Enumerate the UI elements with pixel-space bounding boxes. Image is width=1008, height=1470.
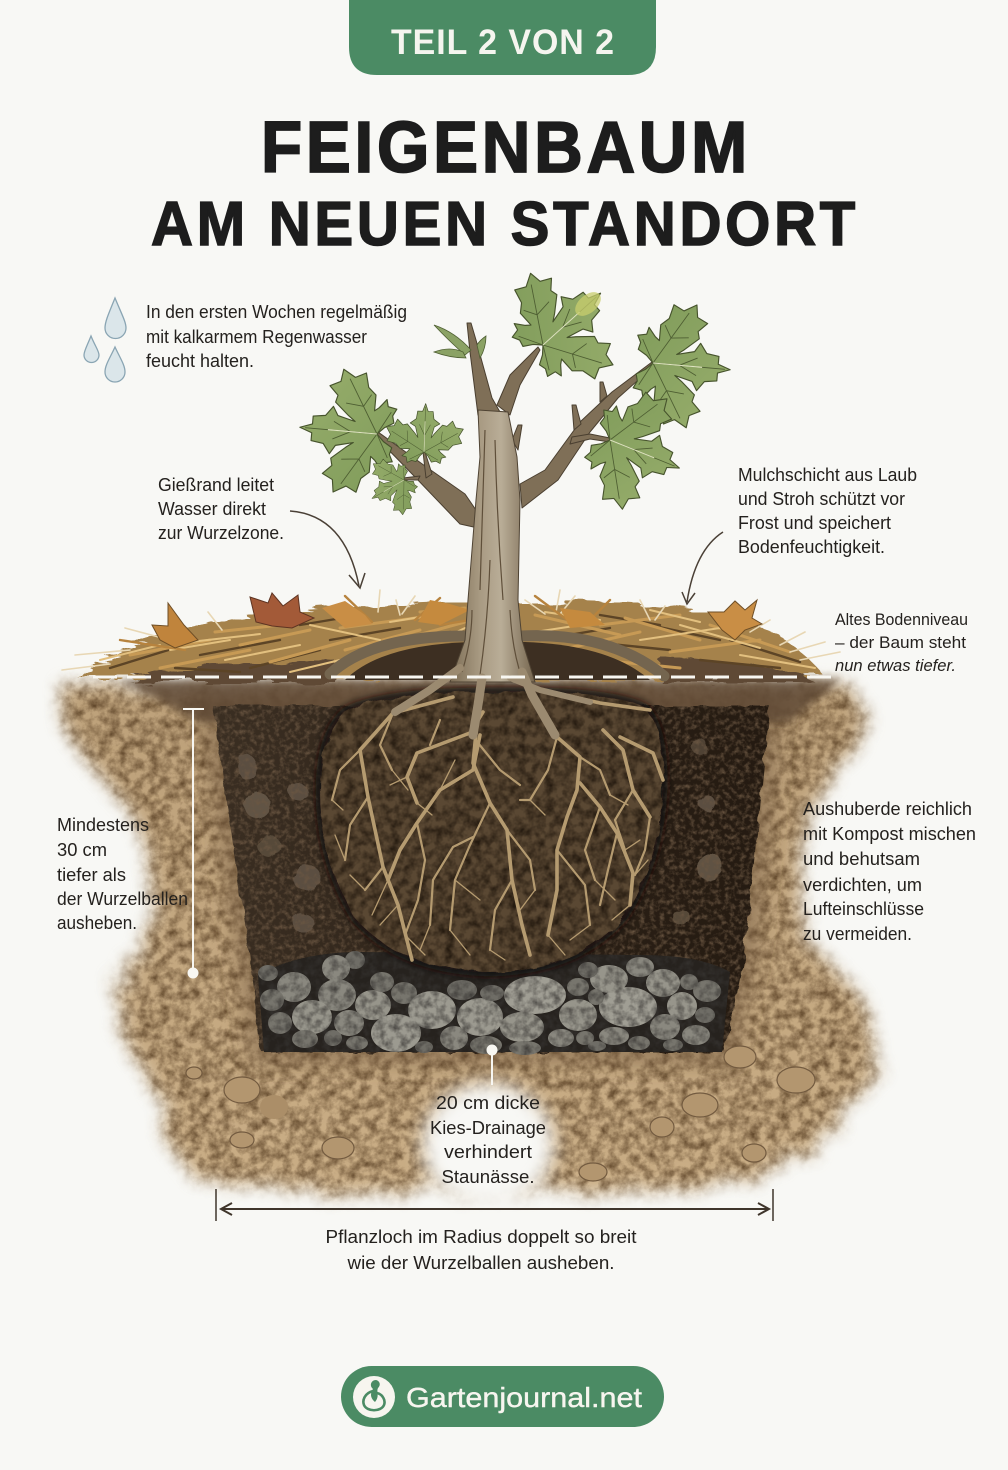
text: mulch layer: Bodenfeuchtigkeit. <box>738 537 885 557</box>
text: depth note: 30 cm <box>57 840 107 860</box>
branches <box>376 323 654 528</box>
text: watering note <box>146 302 407 371</box>
text: backfill note: Lufteinschlüsse <box>803 899 924 919</box>
text: gravel note: Staunässe. <box>442 1167 534 1187</box>
text: watering note: mit kalkarmem Regenwasser <box>146 327 367 347</box>
dark earth under the mulch <box>130 656 815 682</box>
title: AM NEUEN STANDORT <box>151 190 859 259</box>
fallen leaf: left orange <box>152 603 198 648</box>
leaf: left large <box>294 366 400 497</box>
topsoil band below the old level line <box>120 680 840 722</box>
text: backfill note: verdichten, um <box>803 875 922 895</box>
text: backfill note: Aushuberde reichlich <box>803 799 972 819</box>
text: backfill note: zu vermeiden. <box>803 924 912 944</box>
gravel marker <box>486 1044 498 1085</box>
trunk bark lines <box>462 430 522 678</box>
text: watering note: In den ersten Wochen regelmäßig <box>146 302 407 322</box>
fallen leaf: red <box>250 593 314 628</box>
leaf: right upper <box>630 300 736 431</box>
arrow: watering rim <box>290 511 365 588</box>
text: watering rim: zur Wurzelzone. <box>158 523 284 543</box>
root flare <box>395 668 590 735</box>
root ball shadow <box>320 692 663 972</box>
footer badge: Gartenjournal.net <box>341 1366 664 1427</box>
text: gravel note: verhindert <box>444 1142 532 1162</box>
root ball <box>320 692 663 972</box>
text: depth note: ausheben. <box>57 913 137 933</box>
fallen leaf: middle orange <box>322 601 372 628</box>
roots <box>332 690 663 960</box>
mulch layer <box>62 590 840 682</box>
text: old soil level <box>835 610 968 675</box>
depth marker <box>183 709 204 978</box>
leaf: left small lower <box>357 450 426 524</box>
text: watering rim: Wasser direkt <box>158 499 266 519</box>
text: mulch layer <box>738 465 917 557</box>
text: gravel note: Kies-Drainage <box>430 1118 546 1138</box>
straw strands <box>62 590 840 672</box>
title: FEIGENBAUM <box>261 108 751 188</box>
fallen leaf: near trunk <box>418 600 605 628</box>
text: backfill note <box>803 799 976 944</box>
leaf: left small upper <box>385 402 464 464</box>
text: backfill note: mit Kompost mischen <box>803 824 976 844</box>
text: watering rim: Gießrand leitet <box>158 475 274 495</box>
text: mulch layer: und Stroh schützt vor <box>738 489 905 509</box>
text: hole width note: wie der Wurzelballen ausheben. <box>346 1253 614 1273</box>
text: hole width note: Pflanzloch im Radius doppelt so breit <box>326 1227 636 1247</box>
text: gravel note <box>430 1093 546 1187</box>
arrow: mulch layer <box>682 532 723 604</box>
mulch mound <box>78 602 826 678</box>
surface root <box>330 636 664 676</box>
text: depth note: Mindestens <box>57 815 149 835</box>
top badge: part 2 of 2: TEIL 2 VON 2 <box>391 23 615 62</box>
darker soil rim around the pit <box>213 706 770 1052</box>
text: mulch layer: Frost und speichert <box>738 513 891 533</box>
text: watering rim <box>158 475 284 543</box>
icon: water drops <box>84 298 126 382</box>
text: old soil level: nun etwas tiefer. <box>835 656 956 675</box>
fallen leaf: right orange <box>708 600 762 640</box>
icon: logo <box>353 1376 395 1418</box>
text: watering note: feucht halten. <box>146 351 254 371</box>
white glow behind the gravel note <box>422 1083 554 1207</box>
text: old soil level: Altes Bodenniveau <box>835 610 968 629</box>
tree <box>294 247 736 735</box>
soil surrounding the planting hole <box>60 686 878 1207</box>
text: old soil level: – der Baum steht <box>835 633 966 652</box>
width dimension arrow <box>216 1189 773 1221</box>
leaf: right lower <box>572 378 702 523</box>
pebbles in the subsoil <box>186 1046 815 1181</box>
old soil level dashed line <box>93 676 832 678</box>
top badge: part 2 of 2 <box>349 0 656 75</box>
text: depth note <box>57 815 188 933</box>
leaf: top <box>489 247 642 403</box>
text: mulch layer: Mulchschicht aus Laub <box>738 465 917 485</box>
planting pit with dark backfill <box>213 706 770 1052</box>
text: hole width note <box>326 1227 636 1273</box>
title <box>151 108 859 259</box>
text: depth note: tiefer als <box>57 865 126 885</box>
text: backfill note: und behutsam <box>803 849 920 869</box>
text: depth note: der Wurzelballen <box>57 889 188 909</box>
footer badge: Gartenjournal.net: Gartenjournal.net <box>406 1382 642 1413</box>
small bud leaves <box>434 325 486 358</box>
text: gravel note: 20 cm dicke <box>436 1093 540 1113</box>
dark soil under the surface root <box>345 642 650 680</box>
trunk <box>450 410 535 682</box>
gravel drainage layer <box>258 951 730 1055</box>
